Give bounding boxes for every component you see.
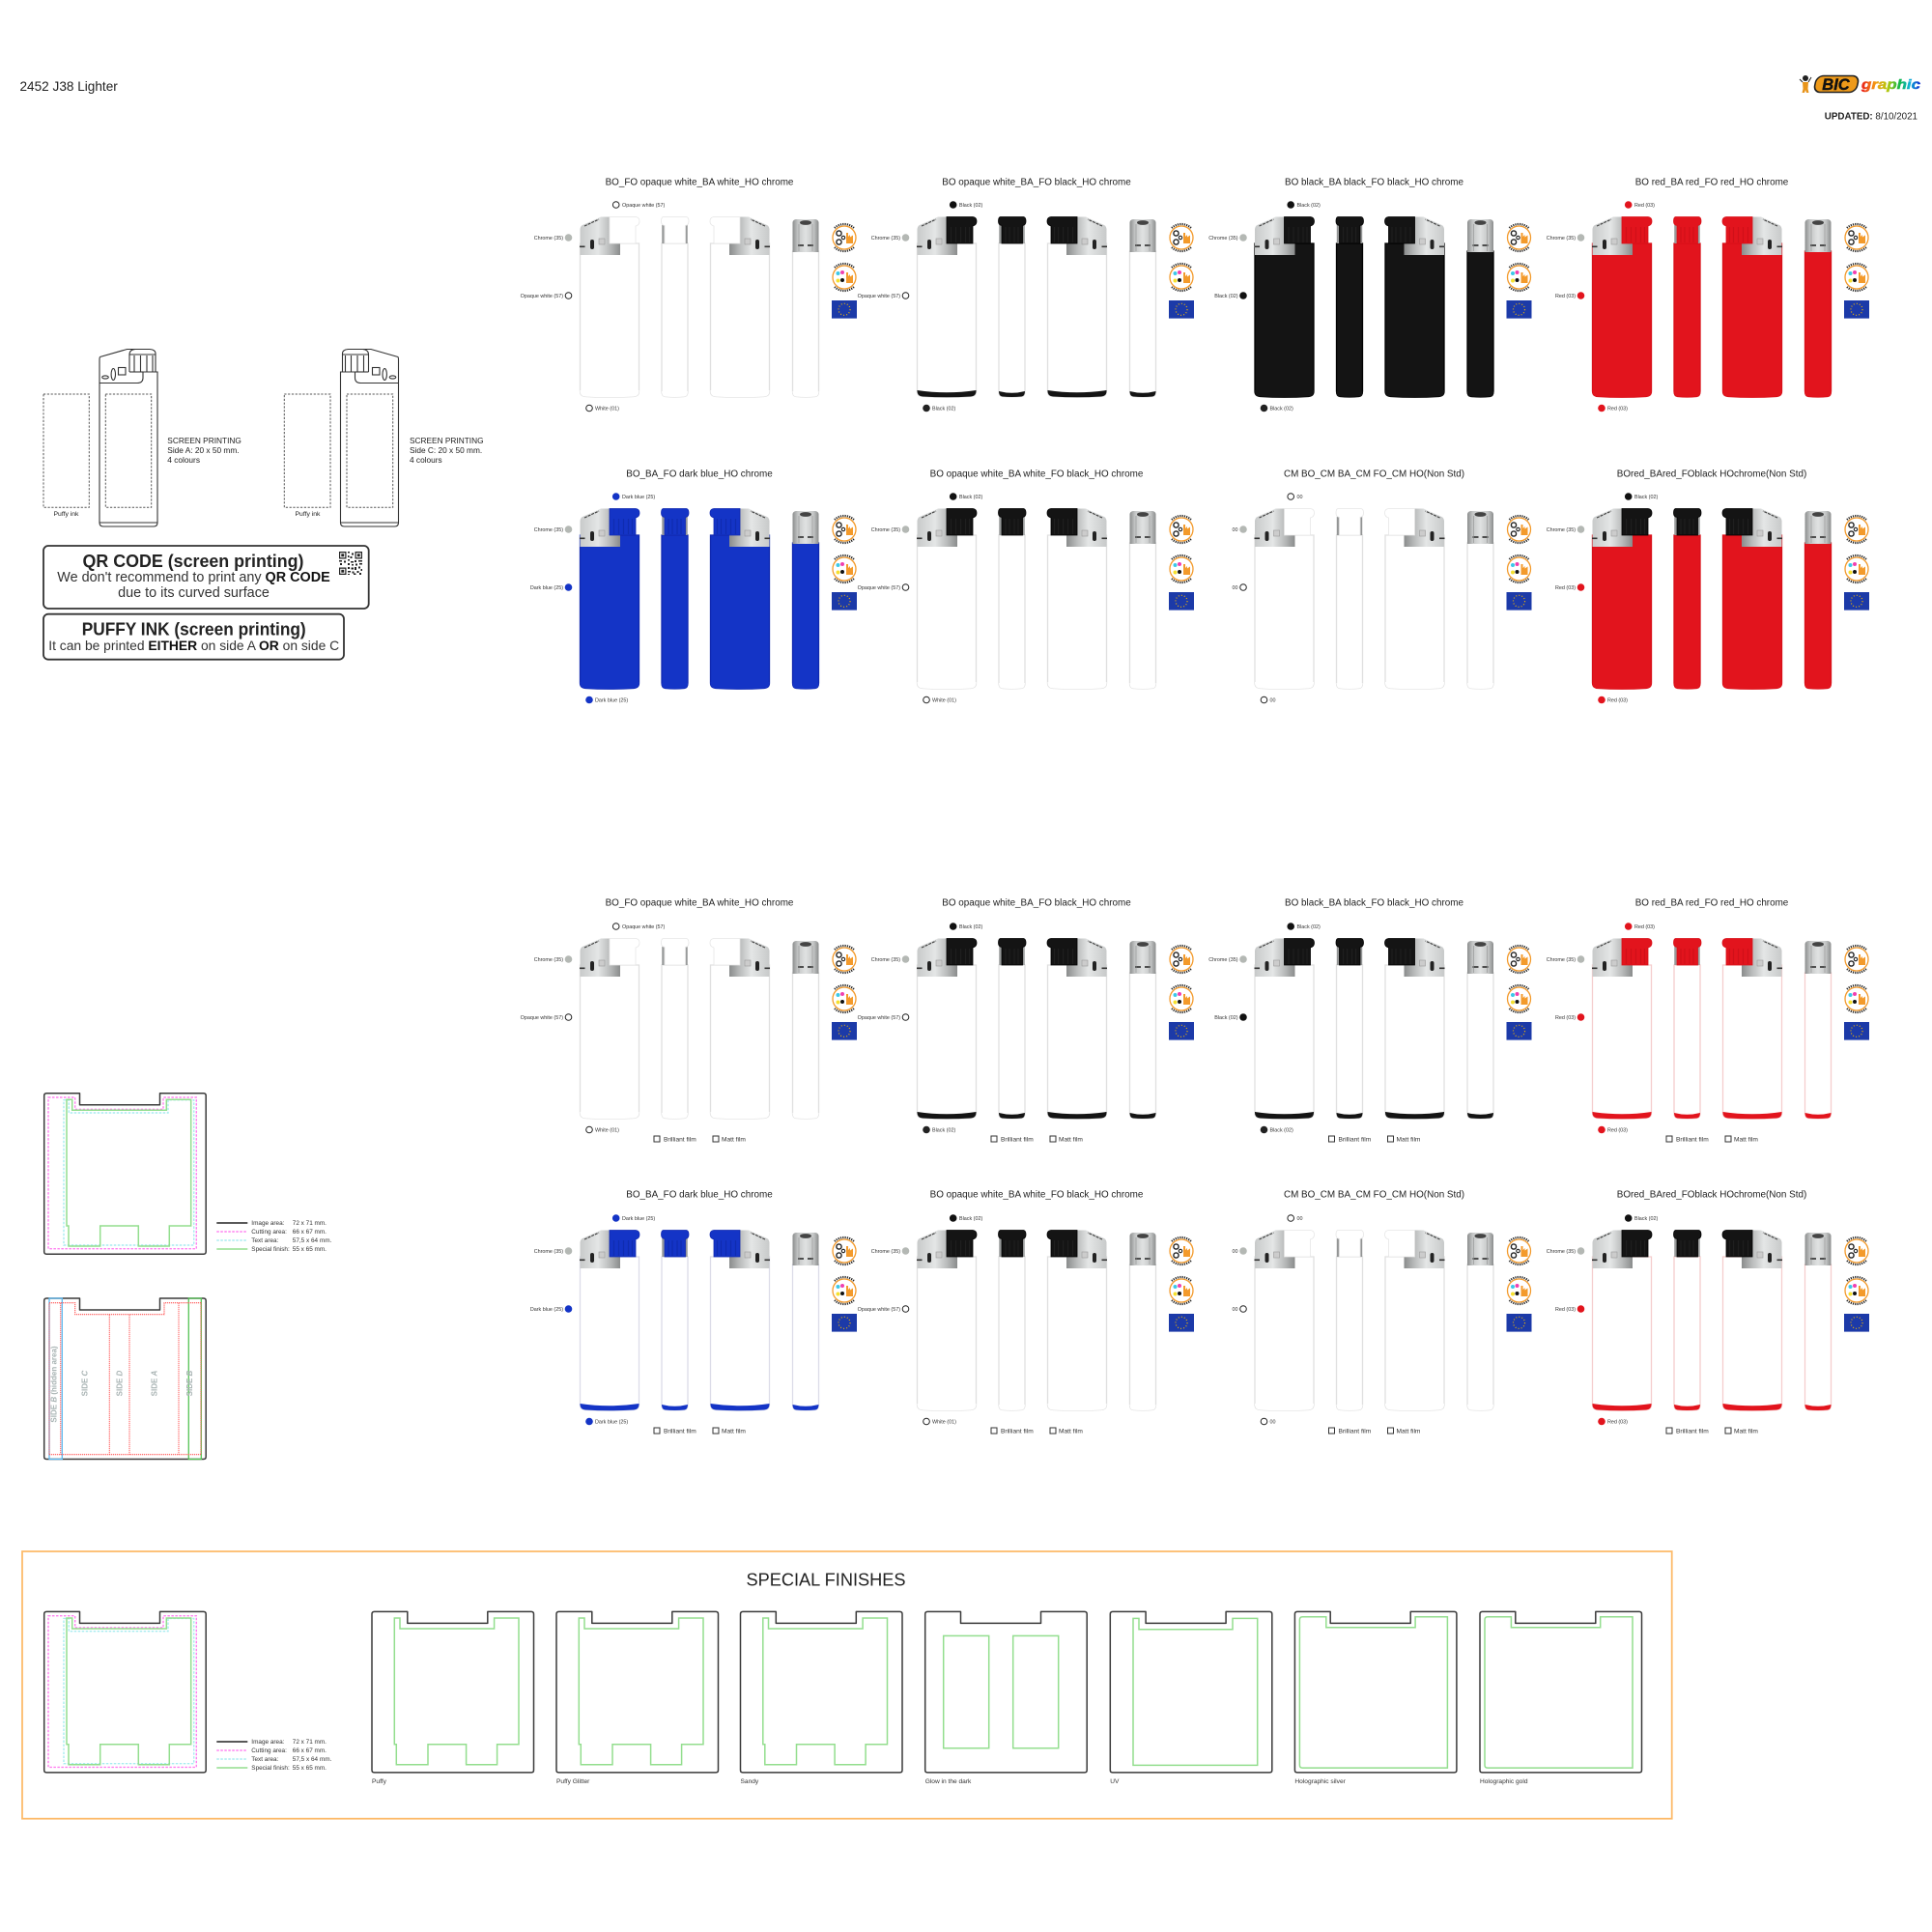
colour callouts: Chrome (35) <box>1547 1249 1576 1255</box>
lighter outline side A <box>99 350 157 526</box>
certification icons <box>832 224 857 319</box>
colour callouts: Red (03) <box>1555 294 1576 299</box>
side labels: SIDE D <box>116 1370 125 1396</box>
film options: Brilliant film <box>664 1428 696 1435</box>
colour callouts: Black (02) <box>959 495 982 500</box>
colour callouts: Chrome (35) <box>1547 236 1576 242</box>
panel: BO FO opaque white BA white <box>521 178 857 412</box>
finish: UV: UV <box>1110 1778 1120 1785</box>
colour callouts <box>1208 201 1321 412</box>
colour callouts: Red (03) <box>1555 1307 1576 1313</box>
finish: puffy glitter: Puffy Glitter <box>556 1778 590 1785</box>
colour callouts <box>1233 1215 1302 1426</box>
film options: Brilliant film <box>1339 1428 1372 1435</box>
colour callouts <box>521 202 666 412</box>
heading: SPECIAL FINISHES <box>746 1571 906 1590</box>
lighter views <box>580 939 819 1119</box>
side labels: SIDE C <box>81 1370 90 1396</box>
finish: puffy <box>372 1611 533 1785</box>
colour callouts: 00 <box>1233 585 1238 591</box>
colour callouts: Chrome (35) <box>1208 957 1238 963</box>
colour callouts: Chrome (35) <box>534 957 563 963</box>
heading: BO_FO opaque white_BA white_HO chrome <box>606 898 794 908</box>
certification icons <box>1507 946 1532 1040</box>
heading: BO opaque white_BA_FO black_HO chrome <box>942 898 1131 908</box>
side A specification: 4 colours <box>167 455 200 465</box>
colour callouts: Opaque white (57) <box>521 294 563 299</box>
film options <box>991 1428 1083 1435</box>
puffy heading: PUFFY INK (screen printing) <box>82 620 306 639</box>
lighter views <box>917 1231 1155 1410</box>
panel: film BO BA FO dark blue <box>530 1190 857 1435</box>
colour callouts: White (01) <box>595 406 619 412</box>
film options <box>654 1428 746 1435</box>
panel: BO black BA black FO black <box>1208 178 1532 412</box>
certification icons <box>1507 224 1532 319</box>
heading: BO black_BA black_FO black_HO chrome <box>1285 898 1463 908</box>
colour callouts: Opaque white (57) <box>521 1015 563 1021</box>
colour callouts: Black (02) <box>959 1216 982 1222</box>
update date: UPDATED: 8/10/2021 <box>1825 111 1918 122</box>
certification icons <box>832 946 857 1040</box>
colour callouts <box>858 493 982 703</box>
heading: BO red_BA red_FO red_HO chrome <box>1635 898 1789 908</box>
puffy ink label: Puffy ink <box>54 511 79 518</box>
lighter views <box>580 216 819 397</box>
certification icons <box>1169 224 1194 319</box>
finish: holographic silver: Holographic silver <box>1294 1778 1347 1785</box>
colour callouts: Chrome (35) <box>1547 527 1576 533</box>
film options: Brilliant film <box>1001 1136 1034 1143</box>
side labels: SIDE A <box>151 1370 159 1396</box>
side labels <box>50 1346 194 1423</box>
logo: BIC graphic: graphic <box>1861 76 1920 92</box>
film options: Matt film <box>1734 1136 1758 1143</box>
colour callouts: 00 <box>1269 697 1275 703</box>
legend: template dimensions <box>216 1220 332 1253</box>
finish: holographic gold <box>1480 1611 1642 1785</box>
panel: BO opaque white BA white FO black <box>858 469 1194 703</box>
colour callouts: Opaque white (57) <box>858 585 900 591</box>
lighter views <box>1254 508 1493 689</box>
colour callouts: Black (02) <box>1214 294 1238 299</box>
certification icons <box>1169 946 1194 1040</box>
panel: BO BA FO dark blue <box>530 469 857 703</box>
colour callouts: Red (03) <box>1555 585 1576 591</box>
heading: BO opaque white_BA_FO black_HO chrome <box>942 178 1131 187</box>
colour callouts: Black (02) <box>1214 1015 1238 1021</box>
colour callouts: Black (02) <box>1269 1128 1293 1134</box>
heading: CM BO_CM BA_CM FO_CM HO(Non Std) <box>1284 1190 1464 1200</box>
title: product code: 2452 J38 Lighter <box>19 79 118 94</box>
film options: Matt film <box>1397 1428 1421 1435</box>
film options <box>654 1136 746 1143</box>
lighter views <box>1592 216 1832 397</box>
panel: BO red BA red FO black <box>1547 469 1869 703</box>
callout: QR code <box>43 546 369 609</box>
heading: BOred_BAred_FOblack HOchrome(Non Std) <box>1617 1190 1806 1200</box>
heading: BO opaque white_BA white_FO black_HO chrome <box>930 1190 1144 1200</box>
print area <box>347 394 393 507</box>
film options <box>1666 1428 1758 1435</box>
film options: Brilliant film <box>1676 1428 1709 1435</box>
print area <box>105 394 152 507</box>
colour callouts <box>1547 493 1658 703</box>
colour callouts: 00 <box>1233 1249 1238 1255</box>
side C specification: 4 colours <box>410 455 442 465</box>
colour callouts: White (01) <box>595 1128 619 1134</box>
puffy ink area <box>284 394 330 507</box>
panel: screen printing side C <box>284 350 484 526</box>
colour callouts <box>1547 923 1655 1134</box>
heading: BO_BA_FO dark blue_HO chrome <box>626 1190 773 1200</box>
lighter views <box>1254 1231 1493 1410</box>
colour callouts: Chrome (35) <box>871 957 900 963</box>
finish: puffy: Puffy <box>372 1778 387 1785</box>
finish: holographic gold: Holographic gold <box>1480 1778 1528 1785</box>
colour callouts: Opaque white (57) <box>858 1015 900 1021</box>
heading: BO opaque white_BA white_FO black_HO chrome <box>930 469 1144 479</box>
colour callouts: Black (02) <box>1269 406 1293 412</box>
side C specification: SCREEN PRINTING <box>410 436 484 445</box>
heading: BO_BA_FO dark blue_HO chrome <box>626 469 773 479</box>
QR heading: QR CODE (screen printing) <box>83 552 303 571</box>
colour callouts <box>1208 923 1321 1134</box>
colour callouts <box>1547 1214 1658 1426</box>
certification icons <box>1844 946 1869 1040</box>
colour callouts <box>521 923 666 1134</box>
colour callouts: 00 <box>1269 1420 1275 1426</box>
template: side layout <box>44 1298 206 1459</box>
panel: CM non standard <box>1233 469 1532 703</box>
colour callouts: 00 <box>1233 527 1238 533</box>
lighter views <box>917 216 1155 397</box>
certification icons <box>1844 1237 1869 1332</box>
colour callouts: Chrome (35) <box>871 527 900 533</box>
colour callouts: Dark blue (25) <box>622 1216 655 1222</box>
film options: Matt film <box>722 1428 746 1435</box>
certification icons <box>1507 1237 1532 1332</box>
colour callouts: White (01) <box>932 697 956 703</box>
finish: puffy glitter <box>556 1611 719 1785</box>
panel: film BO red BA red FO black <box>1547 1190 1869 1435</box>
colour callouts: 00 <box>1296 1216 1302 1222</box>
puffy ink label: Puffy ink <box>296 511 321 518</box>
lighter views <box>1592 939 1832 1119</box>
colour callouts: Black (02) <box>1634 495 1658 500</box>
film options <box>991 1136 1083 1143</box>
colour callouts: Red (03) <box>1555 1015 1576 1021</box>
colour callouts: Chrome (35) <box>534 236 563 242</box>
heading: BO_FO opaque white_BA white_HO chrome <box>606 178 794 187</box>
colour callouts: Red (03) <box>1607 1420 1628 1426</box>
colour callouts: Opaque white (57) <box>858 1307 900 1313</box>
colour callouts: Red (03) <box>1634 203 1655 209</box>
panel: film BO red BA red FO red <box>1547 898 1869 1143</box>
panel: screen printing side A <box>43 350 242 526</box>
film options <box>1329 1136 1421 1143</box>
colour callouts: White (01) <box>932 1420 956 1426</box>
logo: BIC graphic <box>1800 75 1920 94</box>
colour callouts: Black (02) <box>1296 924 1321 930</box>
heading: BO red_BA red_FO red_HO chrome <box>1635 178 1789 187</box>
film options: Matt film <box>1059 1428 1083 1435</box>
lighter views <box>1254 216 1493 397</box>
film options: Brilliant film <box>1339 1136 1372 1143</box>
colour callouts <box>530 493 655 703</box>
colour callouts: 00 <box>1233 1307 1238 1313</box>
colour callouts: Black (02) <box>932 406 955 412</box>
finish: sandy <box>740 1611 902 1785</box>
side labels: SIDE B <box>185 1370 194 1396</box>
colour callouts: Black (02) <box>1296 203 1321 209</box>
template: print area dimensions <box>44 1094 206 1254</box>
certification icons <box>1844 224 1869 319</box>
heading: BOred_BAred_FOblack HOchrome(Non Std) <box>1617 469 1806 479</box>
QR note line 2: due to its curved surface <box>118 585 270 601</box>
colour callouts: Black (02) <box>959 924 982 930</box>
lighter views <box>917 939 1155 1119</box>
finish: glow in the dark: Glow in the dark <box>925 1778 972 1785</box>
film options: Brilliant film <box>664 1136 696 1143</box>
panel: film BO opaque white BA FO black <box>858 898 1194 1143</box>
panel: BO red BA red FO red <box>1547 178 1869 412</box>
finish: sandy: Sandy <box>740 1778 759 1785</box>
finish: holographic silver <box>1294 1611 1457 1785</box>
certification icons <box>832 516 857 611</box>
film options <box>1329 1428 1421 1435</box>
colour callouts: Dark blue (25) <box>595 1420 628 1426</box>
film options: Matt film <box>1059 1136 1083 1143</box>
panel: BO opaque white BA FO black <box>858 178 1194 412</box>
colour callouts: Red (03) <box>1607 1128 1628 1134</box>
panel: film CM non standard <box>1233 1190 1532 1435</box>
template: reference dimensions <box>44 1611 206 1773</box>
film options: Brilliant film <box>1676 1136 1709 1143</box>
colour callouts: Dark blue (25) <box>530 1307 563 1313</box>
colour callouts: Opaque white (57) <box>622 203 666 209</box>
colour callouts: Black (02) <box>1634 1216 1658 1222</box>
logo: BIC graphic: BIC <box>1822 76 1851 94</box>
panel: film BO FO opaque white <box>521 898 857 1143</box>
colour callouts <box>1547 201 1655 412</box>
colour callouts: Red (03) <box>1607 406 1628 412</box>
side A specification: SCREEN PRINTING <box>167 436 242 445</box>
film options: Matt film <box>722 1136 746 1143</box>
panel: special finishes <box>22 1551 1672 1819</box>
colour callouts: Opaque white (57) <box>622 924 666 930</box>
legend: reference dimensions <box>216 1739 332 1772</box>
colour callouts: Chrome (35) <box>1208 236 1238 242</box>
colour callouts: Dark blue (25) <box>595 697 628 703</box>
lighter views <box>917 508 1155 689</box>
lighter views <box>580 1231 819 1410</box>
lighter outline side C <box>340 350 398 526</box>
colour callouts: Chrome (35) <box>1547 957 1576 963</box>
colour callouts <box>1233 494 1302 703</box>
finish: glow in the dark <box>925 1611 1087 1785</box>
side C specification: Side C: 20 x 50 mm. <box>410 445 482 455</box>
colour callouts: Chrome (35) <box>871 236 900 242</box>
film options <box>1666 1136 1758 1143</box>
colour callouts: Opaque white (57) <box>858 294 900 299</box>
lighter views <box>1592 1231 1832 1410</box>
heading: BO black_BA black_FO black_HO chrome <box>1285 178 1463 187</box>
certification icons <box>832 1237 857 1332</box>
certification icons <box>1169 516 1194 611</box>
side labels: SIDE B (hidden area) <box>50 1346 59 1423</box>
panel: film BO opaque white BA white FO black <box>858 1190 1194 1435</box>
colour callouts: Red (03) <box>1634 924 1655 930</box>
colour callouts <box>858 923 982 1134</box>
lighter views <box>580 508 819 689</box>
certification icons <box>1844 516 1869 611</box>
film options: Matt film <box>1397 1136 1421 1143</box>
puffy note: It can be printed EITHER on side A OR on side C <box>48 638 339 653</box>
film options: Matt film <box>1734 1428 1758 1435</box>
colour callouts: Chrome (35) <box>534 527 563 533</box>
QR note: We don't recommend to print any QR CODE <box>57 570 330 585</box>
certification icons <box>1507 516 1532 611</box>
finish: UV <box>1110 1611 1272 1785</box>
colour callouts <box>530 1214 655 1426</box>
certification icons <box>1169 1237 1194 1332</box>
lighter views <box>1254 939 1493 1119</box>
side A specification: Side A: 20 x 50 mm. <box>167 445 240 455</box>
colour callouts <box>858 201 982 412</box>
colour callouts: Black (02) <box>959 203 982 209</box>
colour callouts: Black (02) <box>932 1128 955 1134</box>
film options: Brilliant film <box>1001 1428 1034 1435</box>
colour callouts: Dark blue (25) <box>622 495 655 500</box>
icon: QR code <box>339 552 362 575</box>
heading: CM BO_CM BA_CM FO_CM HO(Non Std) <box>1284 469 1464 479</box>
lighter views <box>1592 508 1832 689</box>
colour callouts: Dark blue (25) <box>530 585 563 591</box>
colour callouts: Red (03) <box>1607 697 1628 703</box>
colour callouts: Chrome (35) <box>871 1249 900 1255</box>
colour callouts: 00 <box>1296 495 1302 500</box>
panel: film BO black BA black FO black <box>1208 898 1532 1143</box>
puffy ink area <box>43 394 89 507</box>
colour callouts: Chrome (35) <box>534 1249 563 1255</box>
colour callouts <box>858 1214 982 1426</box>
callout: puffy ink <box>43 614 344 660</box>
